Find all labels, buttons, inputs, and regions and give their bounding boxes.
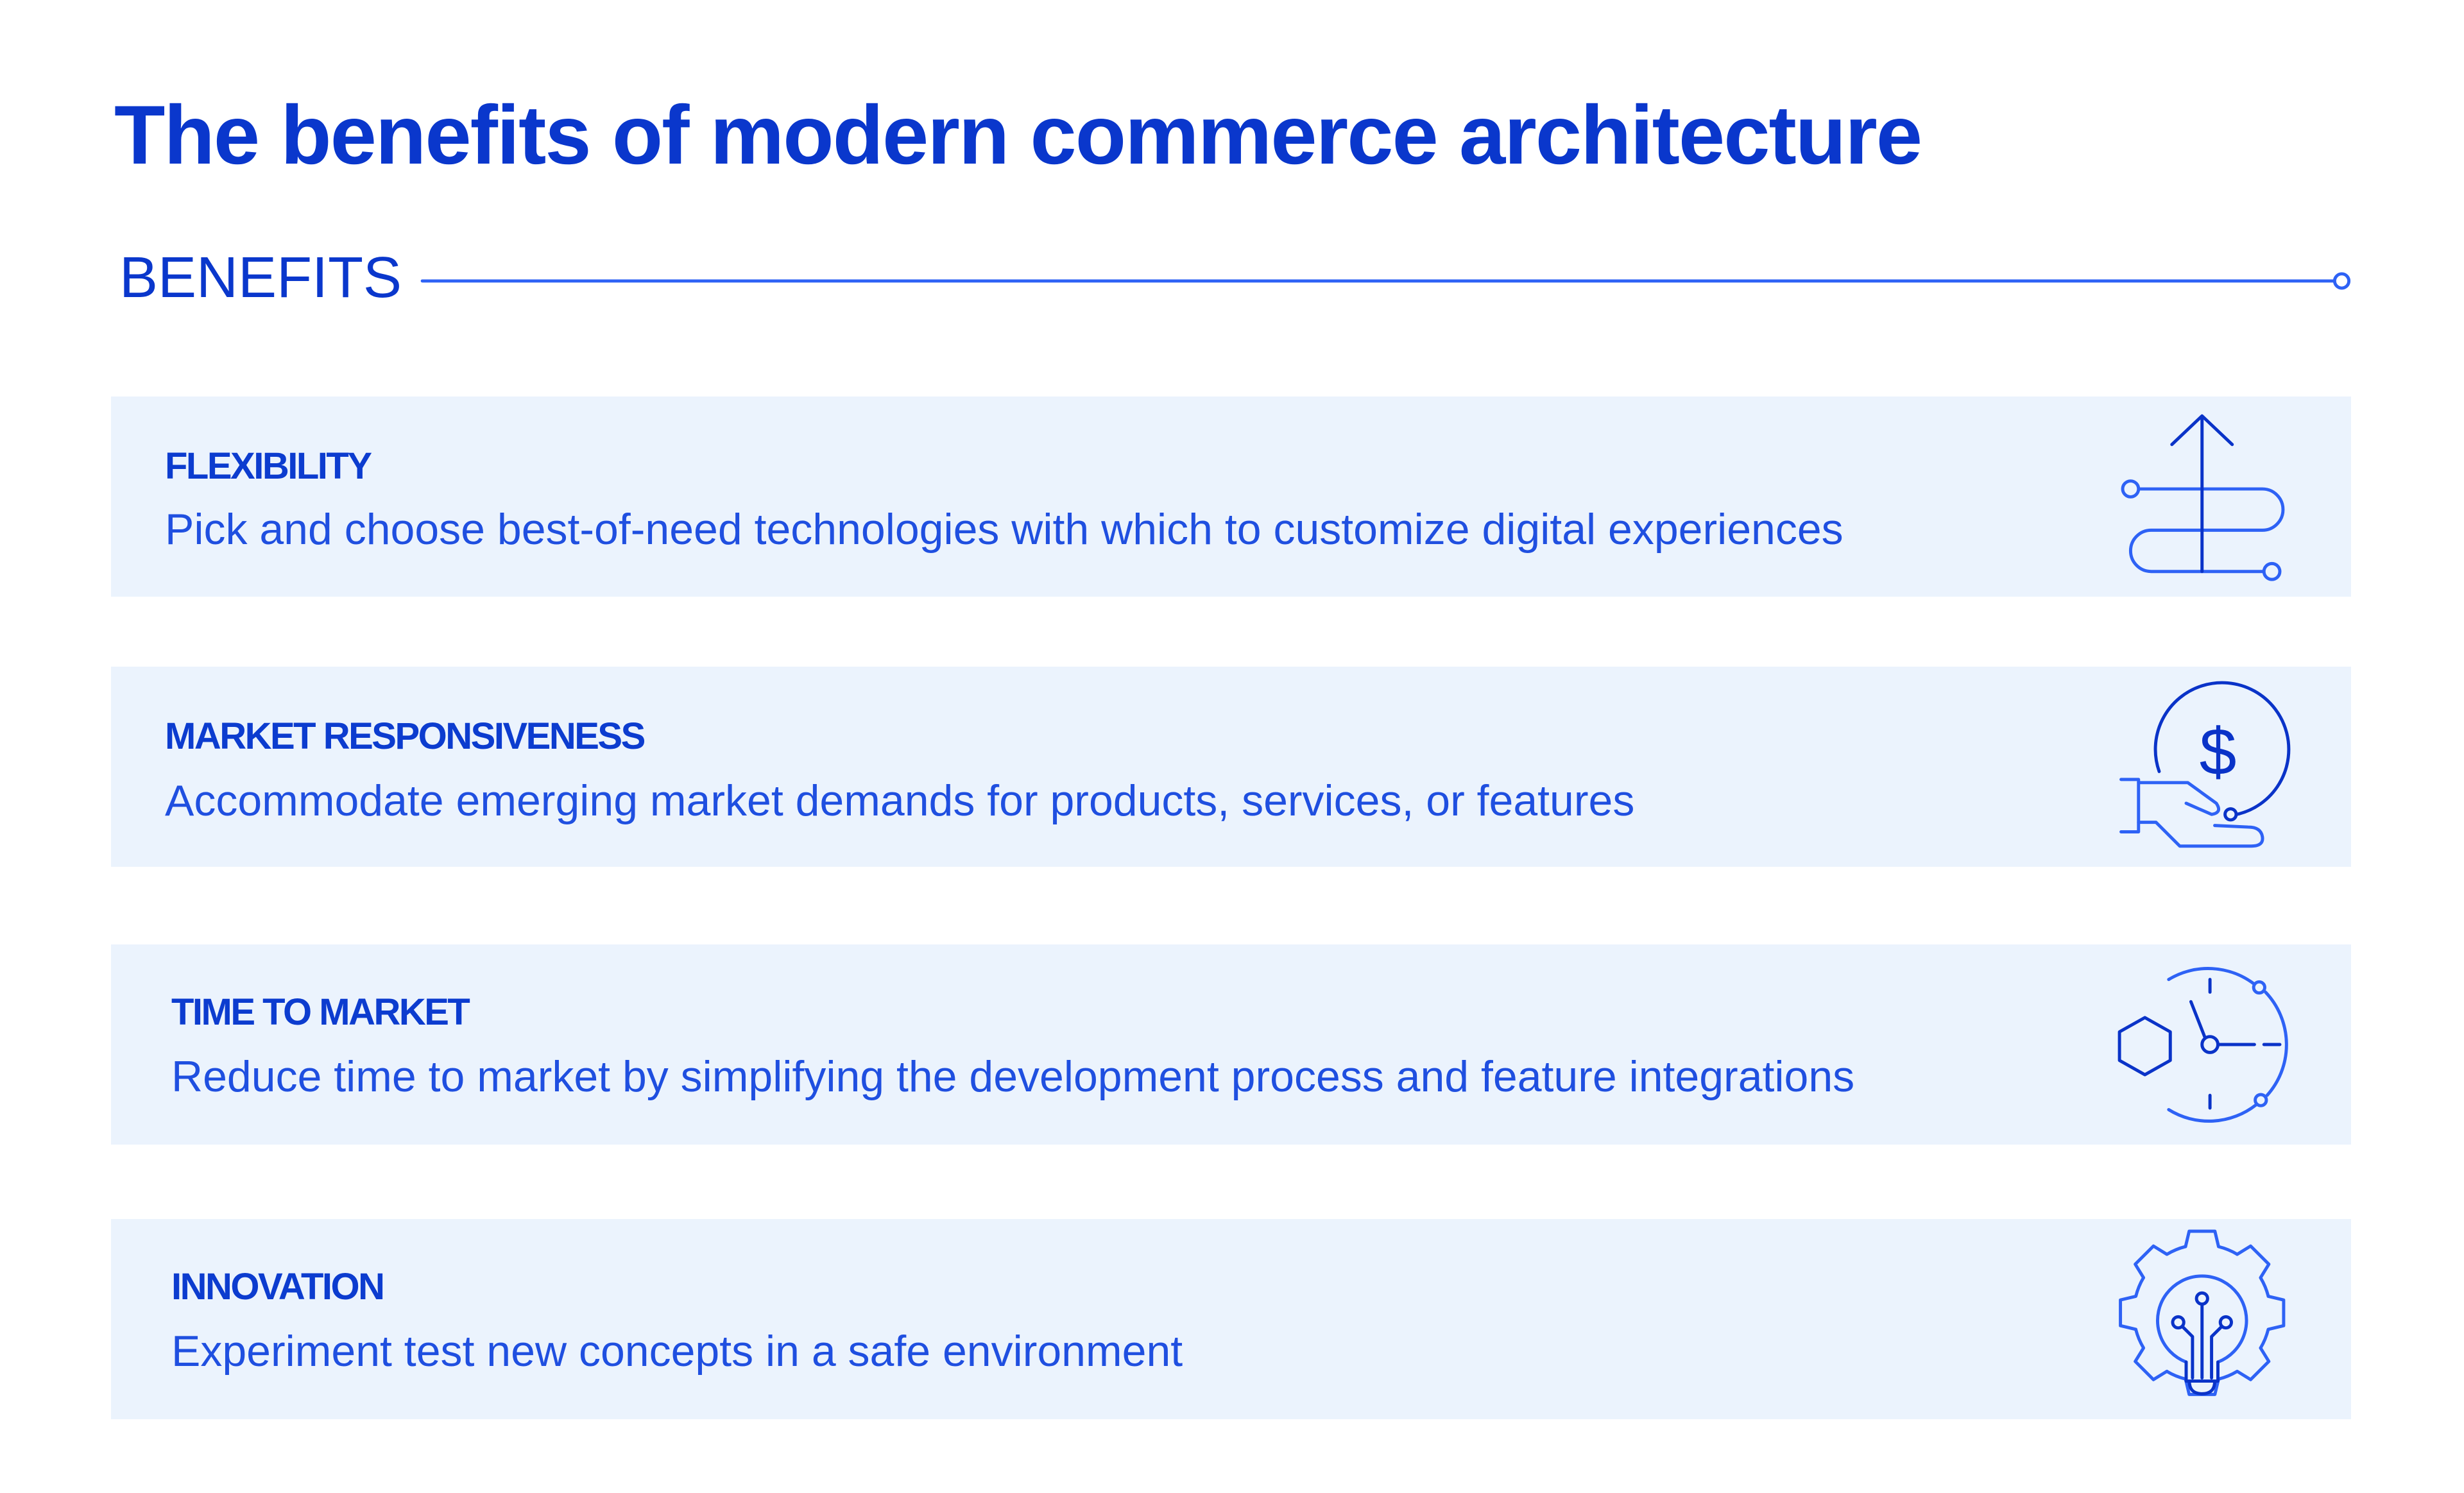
icon: hand with dollar coin xyxy=(2121,683,2289,846)
text: innovation: Experiment test new concepts in a safe environment xyxy=(171,1327,1183,1376)
text: flexibility: Pick and choose best-of-need technologies with which to customize digital experiences xyxy=(165,505,1844,554)
heading: market responsiveness: MARKET RESPONSIVENESS xyxy=(165,715,644,757)
panel: flexibility xyxy=(111,397,2351,597)
section label: benefits: BENEFITS xyxy=(119,246,402,310)
text: market responsiveness: Accommodate emerging market demands for products, services, or features xyxy=(165,776,1634,825)
heading: flexibility: FLEXIBILITY xyxy=(165,445,371,487)
panel: innovation xyxy=(111,1219,2351,1419)
icon: gear with lightbulb xyxy=(2119,1231,2284,1395)
title: The benefits of modern commerce architecture xyxy=(114,88,1921,182)
icon: clock with hexagon xyxy=(2119,969,2286,1121)
icon: hand with dollar coin: $ xyxy=(2200,715,2236,789)
heading: time to market: TIME TO MARKET xyxy=(171,991,468,1033)
divider line with end dot xyxy=(422,274,2349,288)
panel: time to market xyxy=(111,944,2351,1145)
panel: market responsiveness xyxy=(111,667,2351,867)
text: time to market: Reduce time to market by simplifying the development process and feature integrations xyxy=(171,1052,1854,1101)
heading: innovation: INNOVATION xyxy=(171,1266,384,1308)
icon: flexibility path arrow xyxy=(2123,416,2283,579)
